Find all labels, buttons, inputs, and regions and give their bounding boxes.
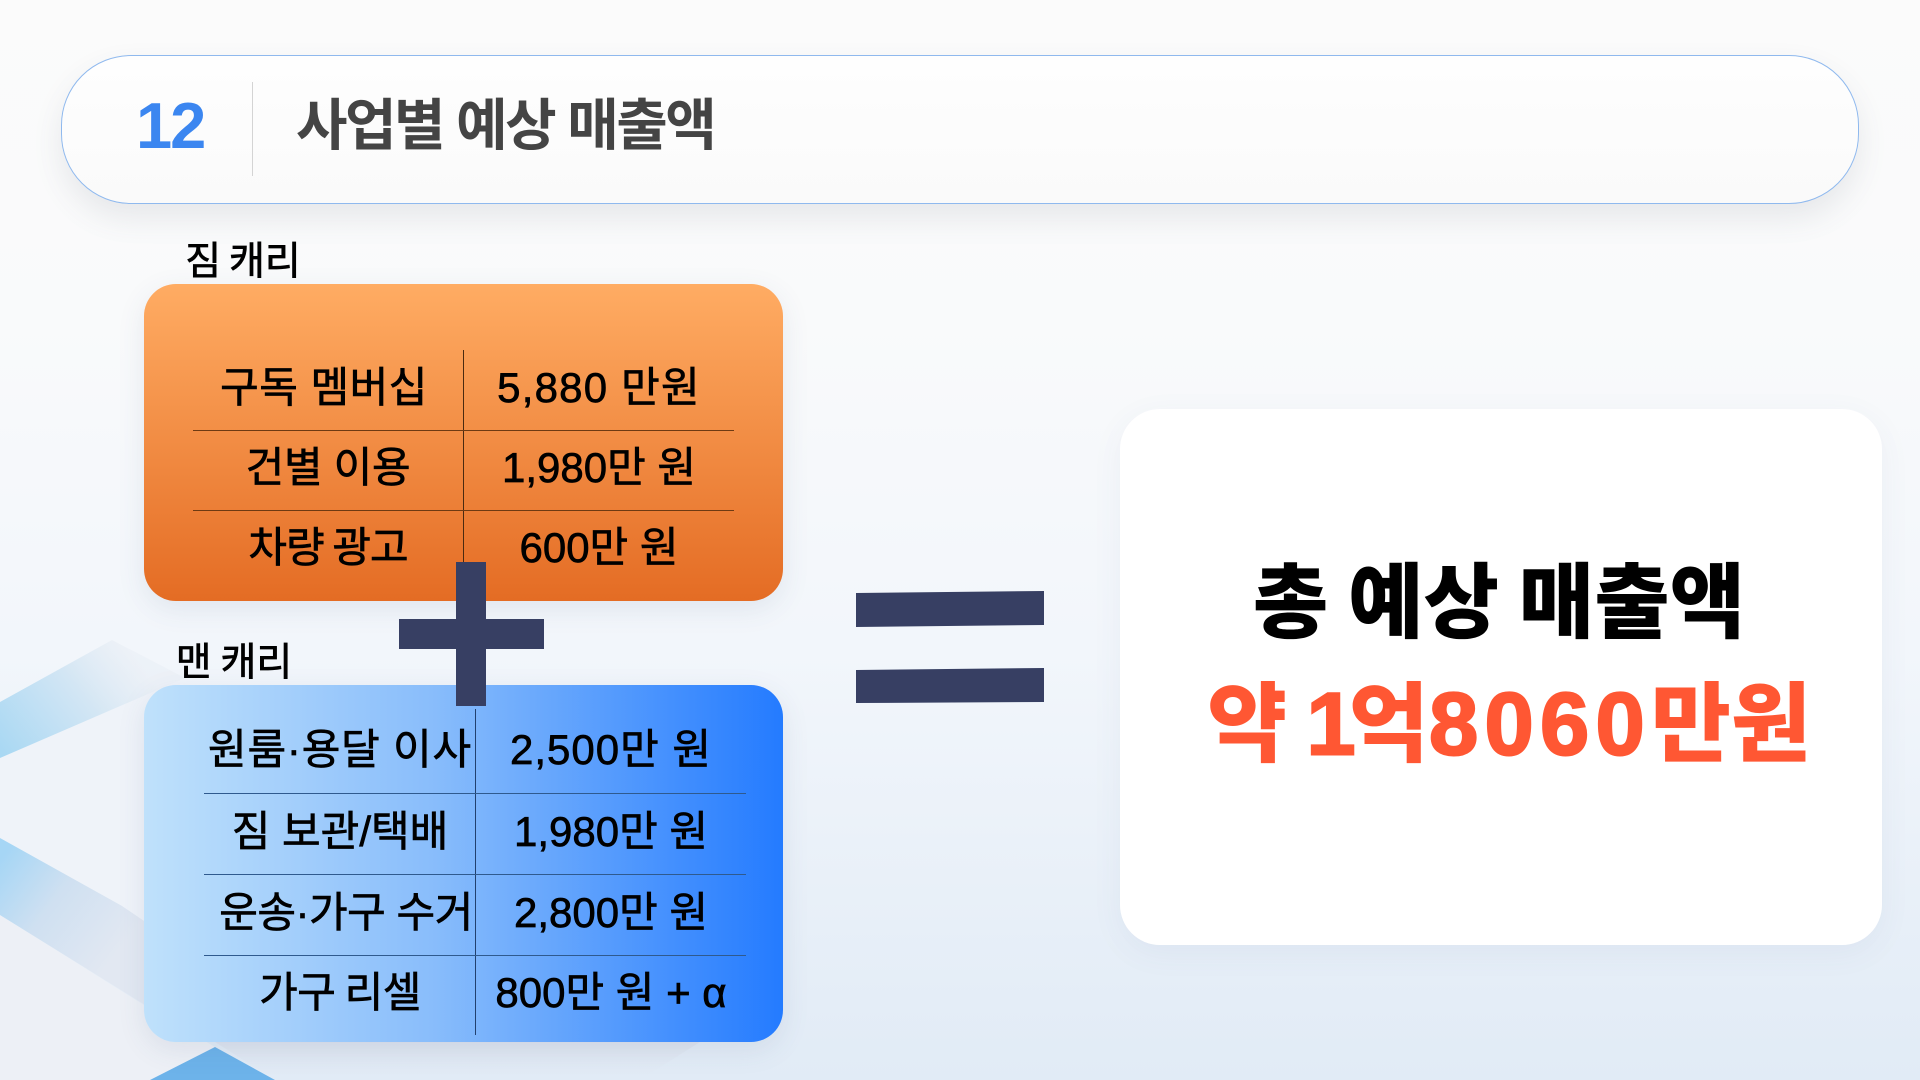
title: 사업별 예상 매출액 <box>296 94 714 157</box>
row: resale: 가구 리셀 <box>259 969 421 1016</box>
row: transport: 운송·가구 수거 <box>219 889 473 936</box>
row: vehicle ads: 차량 광고 <box>248 524 408 571</box>
panel: man carry table: 2,800만 원 <box>514 889 708 936</box>
label: gym carry: 짐 캐리 <box>185 240 301 284</box>
row: subscription: 구독 멤버십 <box>220 364 428 411</box>
panel: total revenue <box>1120 409 1882 945</box>
row: per use: 건별 이용 <box>246 444 410 491</box>
plus sign <box>399 562 544 706</box>
section number: 12 <box>136 89 204 162</box>
row: moving: 원룸·용달 이사 <box>208 726 472 773</box>
equals sign <box>856 591 1044 703</box>
label: man carry: 맨 캐리 <box>176 642 292 684</box>
heading divider <box>252 82 253 176</box>
total label: 총 예상 매출액 <box>1253 558 1745 649</box>
panel: gym carry table: 600만 원 <box>519 524 679 571</box>
panel: gym carry table: 5,880 만원 <box>497 364 701 411</box>
panel: man carry table: 2,500만 원 <box>510 726 712 773</box>
panel: gym carry table: 1,980만 원 <box>502 444 696 491</box>
panel: gym carry table <box>144 284 783 601</box>
panel: man carry table: 1,980만 원 <box>514 808 708 855</box>
row: storage: 짐 보관/택배 <box>232 808 448 855</box>
header bar <box>61 55 1859 204</box>
panel: man carry table <box>144 685 783 1042</box>
panel: man carry table: 800만 원 + α <box>495 969 727 1016</box>
total value: 약 1억8060만원 <box>1207 674 1811 774</box>
